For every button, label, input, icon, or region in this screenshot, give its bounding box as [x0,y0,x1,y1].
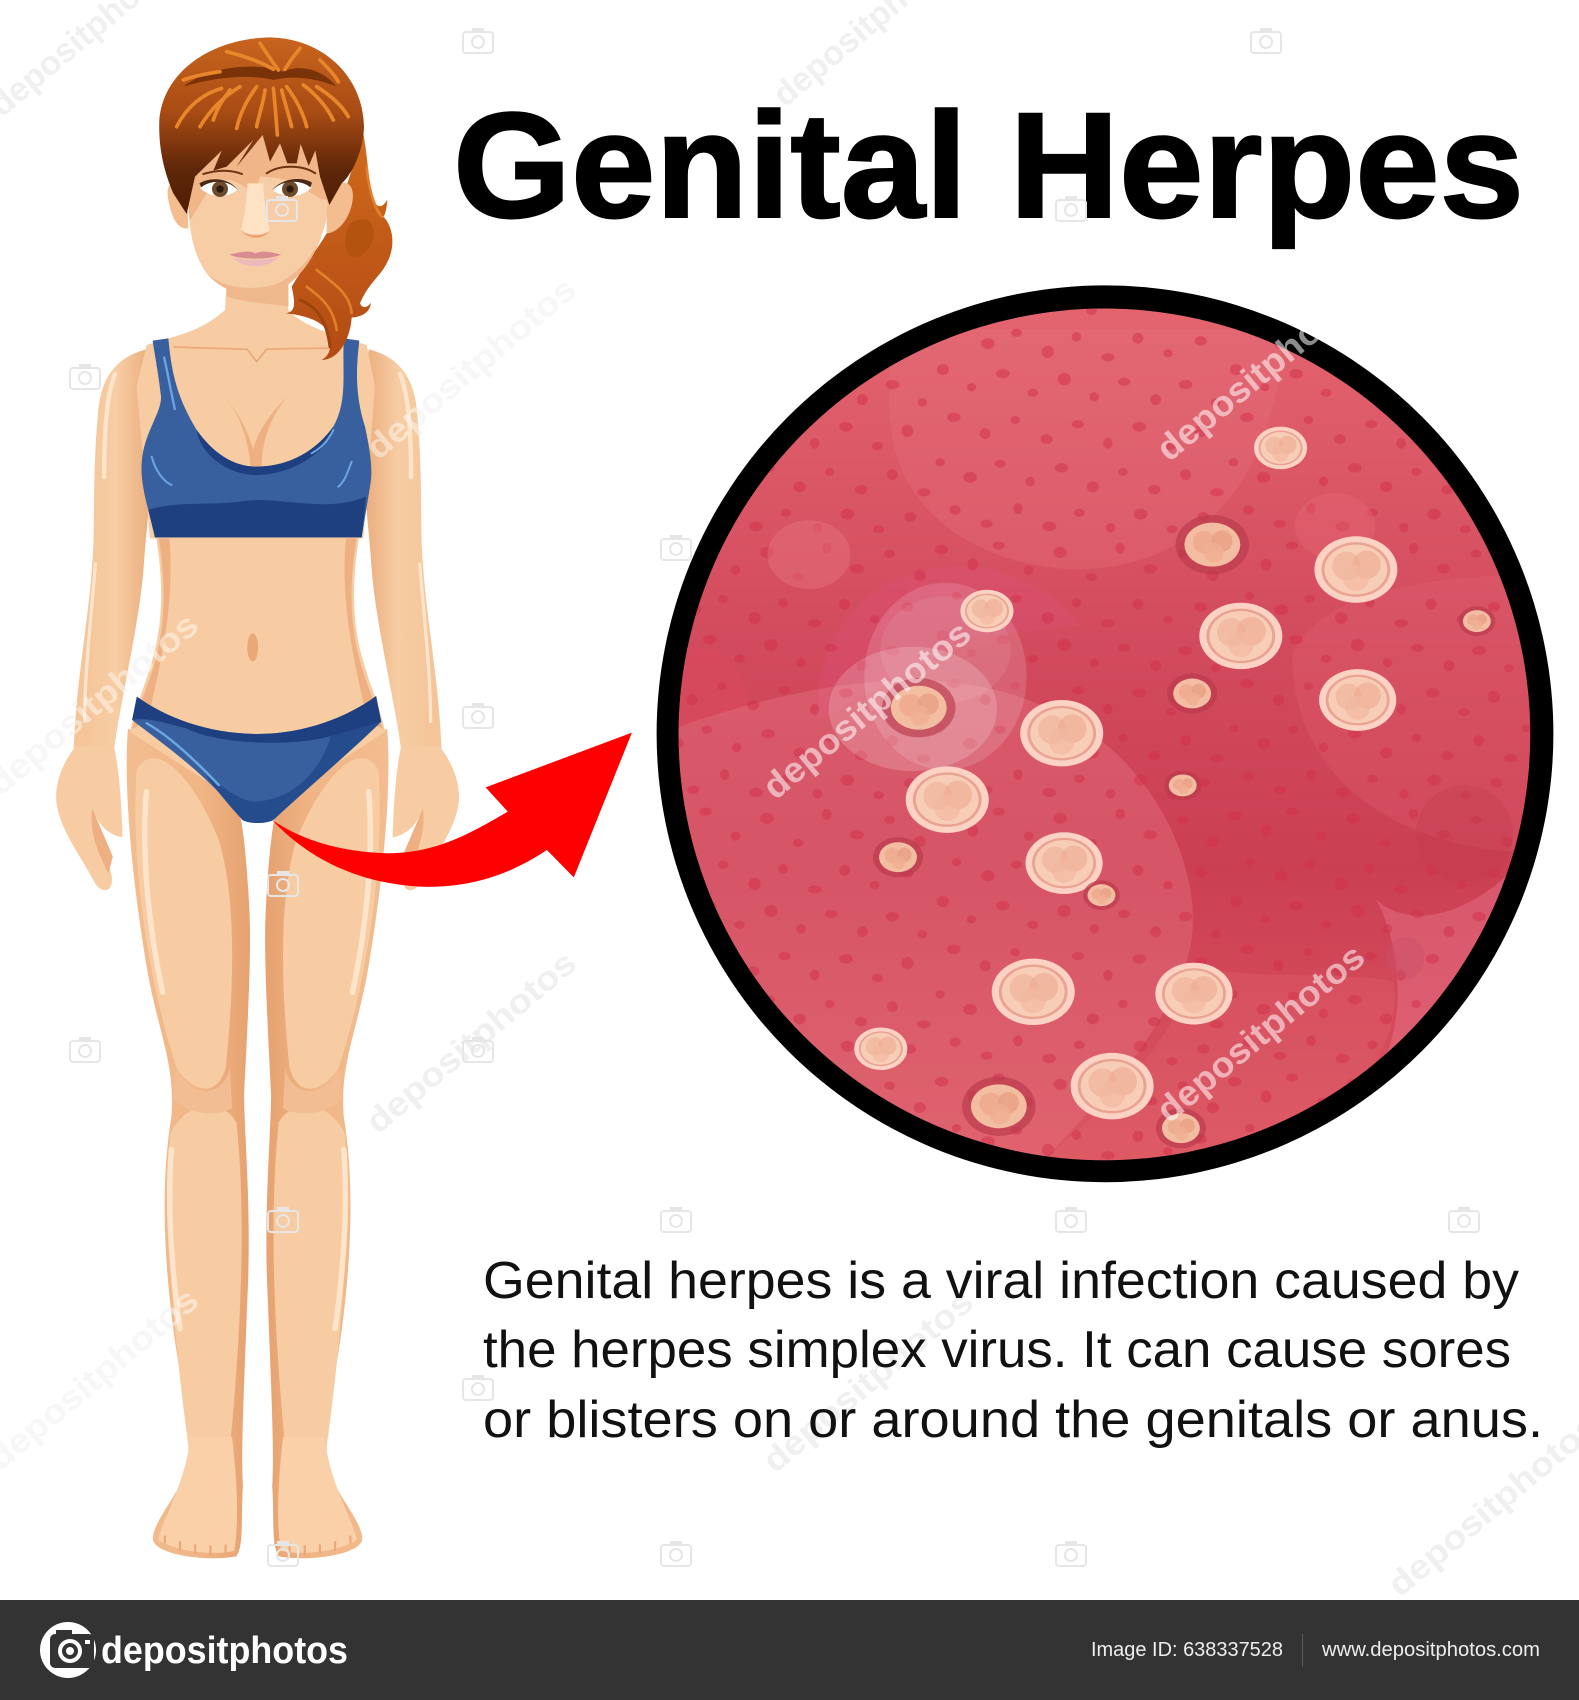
glassy vesicle bubble [829,583,1027,771]
chin shading [207,207,327,295]
forehead and cheek shading [187,120,327,220]
watermark text on lens [755,275,1372,1130]
website: www.depositphotos.com [1321,1639,1540,1661]
description text block: Genital herpes is a viral infection caused by [483,1252,1519,1310]
eye left [199,179,238,197]
title: Genital Herpes [453,81,1524,249]
dark-halo blisters [873,515,1495,1148]
hair highlights [177,43,348,135]
description text block: the herpes simplex virus. It can cause sores [483,1321,1511,1379]
head and face [159,37,364,295]
face shape [187,120,327,295]
large ringed blisters [854,427,1397,1119]
torso, bra and neck [137,280,375,538]
ponytail [286,133,392,360]
lens black border [657,285,1553,1182]
watermark text on background: depositphotos [1381,1407,1579,1604]
arrow pointing from groin to magnified skin view [272,733,632,887]
watermark overlay on figure [0,270,584,1478]
eye right [272,179,312,197]
watermark text on lens: depositphotos [1149,936,1372,1130]
footer bar [0,1600,1579,1700]
watermark overlay on figure: depositphotos [359,270,584,467]
panel: magnified skin circle [657,275,1553,1182]
nose [241,183,270,235]
skin background with lobes [664,300,1542,1172]
figure: woman full body [56,37,459,1558]
description text block [483,1252,1543,1449]
watermark text on background: depositphotos [756,1283,981,1480]
lips [229,252,281,266]
briefs [132,696,381,823]
ear right [327,183,353,233]
nose shadow [241,231,270,238]
hair top with bangs [159,37,364,214]
eyebrows [203,167,315,174]
hair crown parting [183,67,337,87]
icon: depositphotos logo [40,1622,96,1678]
watermark text on lens: depositphotos [1149,275,1372,469]
watermark text on lens: depositphotos [755,613,978,807]
logo wordmark: depositphotos [101,1630,348,1672]
watermark text on background: depositphotos [359,944,584,1141]
limbs: arms, hands and legs [56,349,459,1558]
ear left [168,179,188,228]
description text block: or blisters on or around the genitals or anus. [483,1391,1543,1449]
image id: Image ID: 638337528 [1091,1639,1283,1661]
watermark text on background: depositphotos [359,270,584,467]
